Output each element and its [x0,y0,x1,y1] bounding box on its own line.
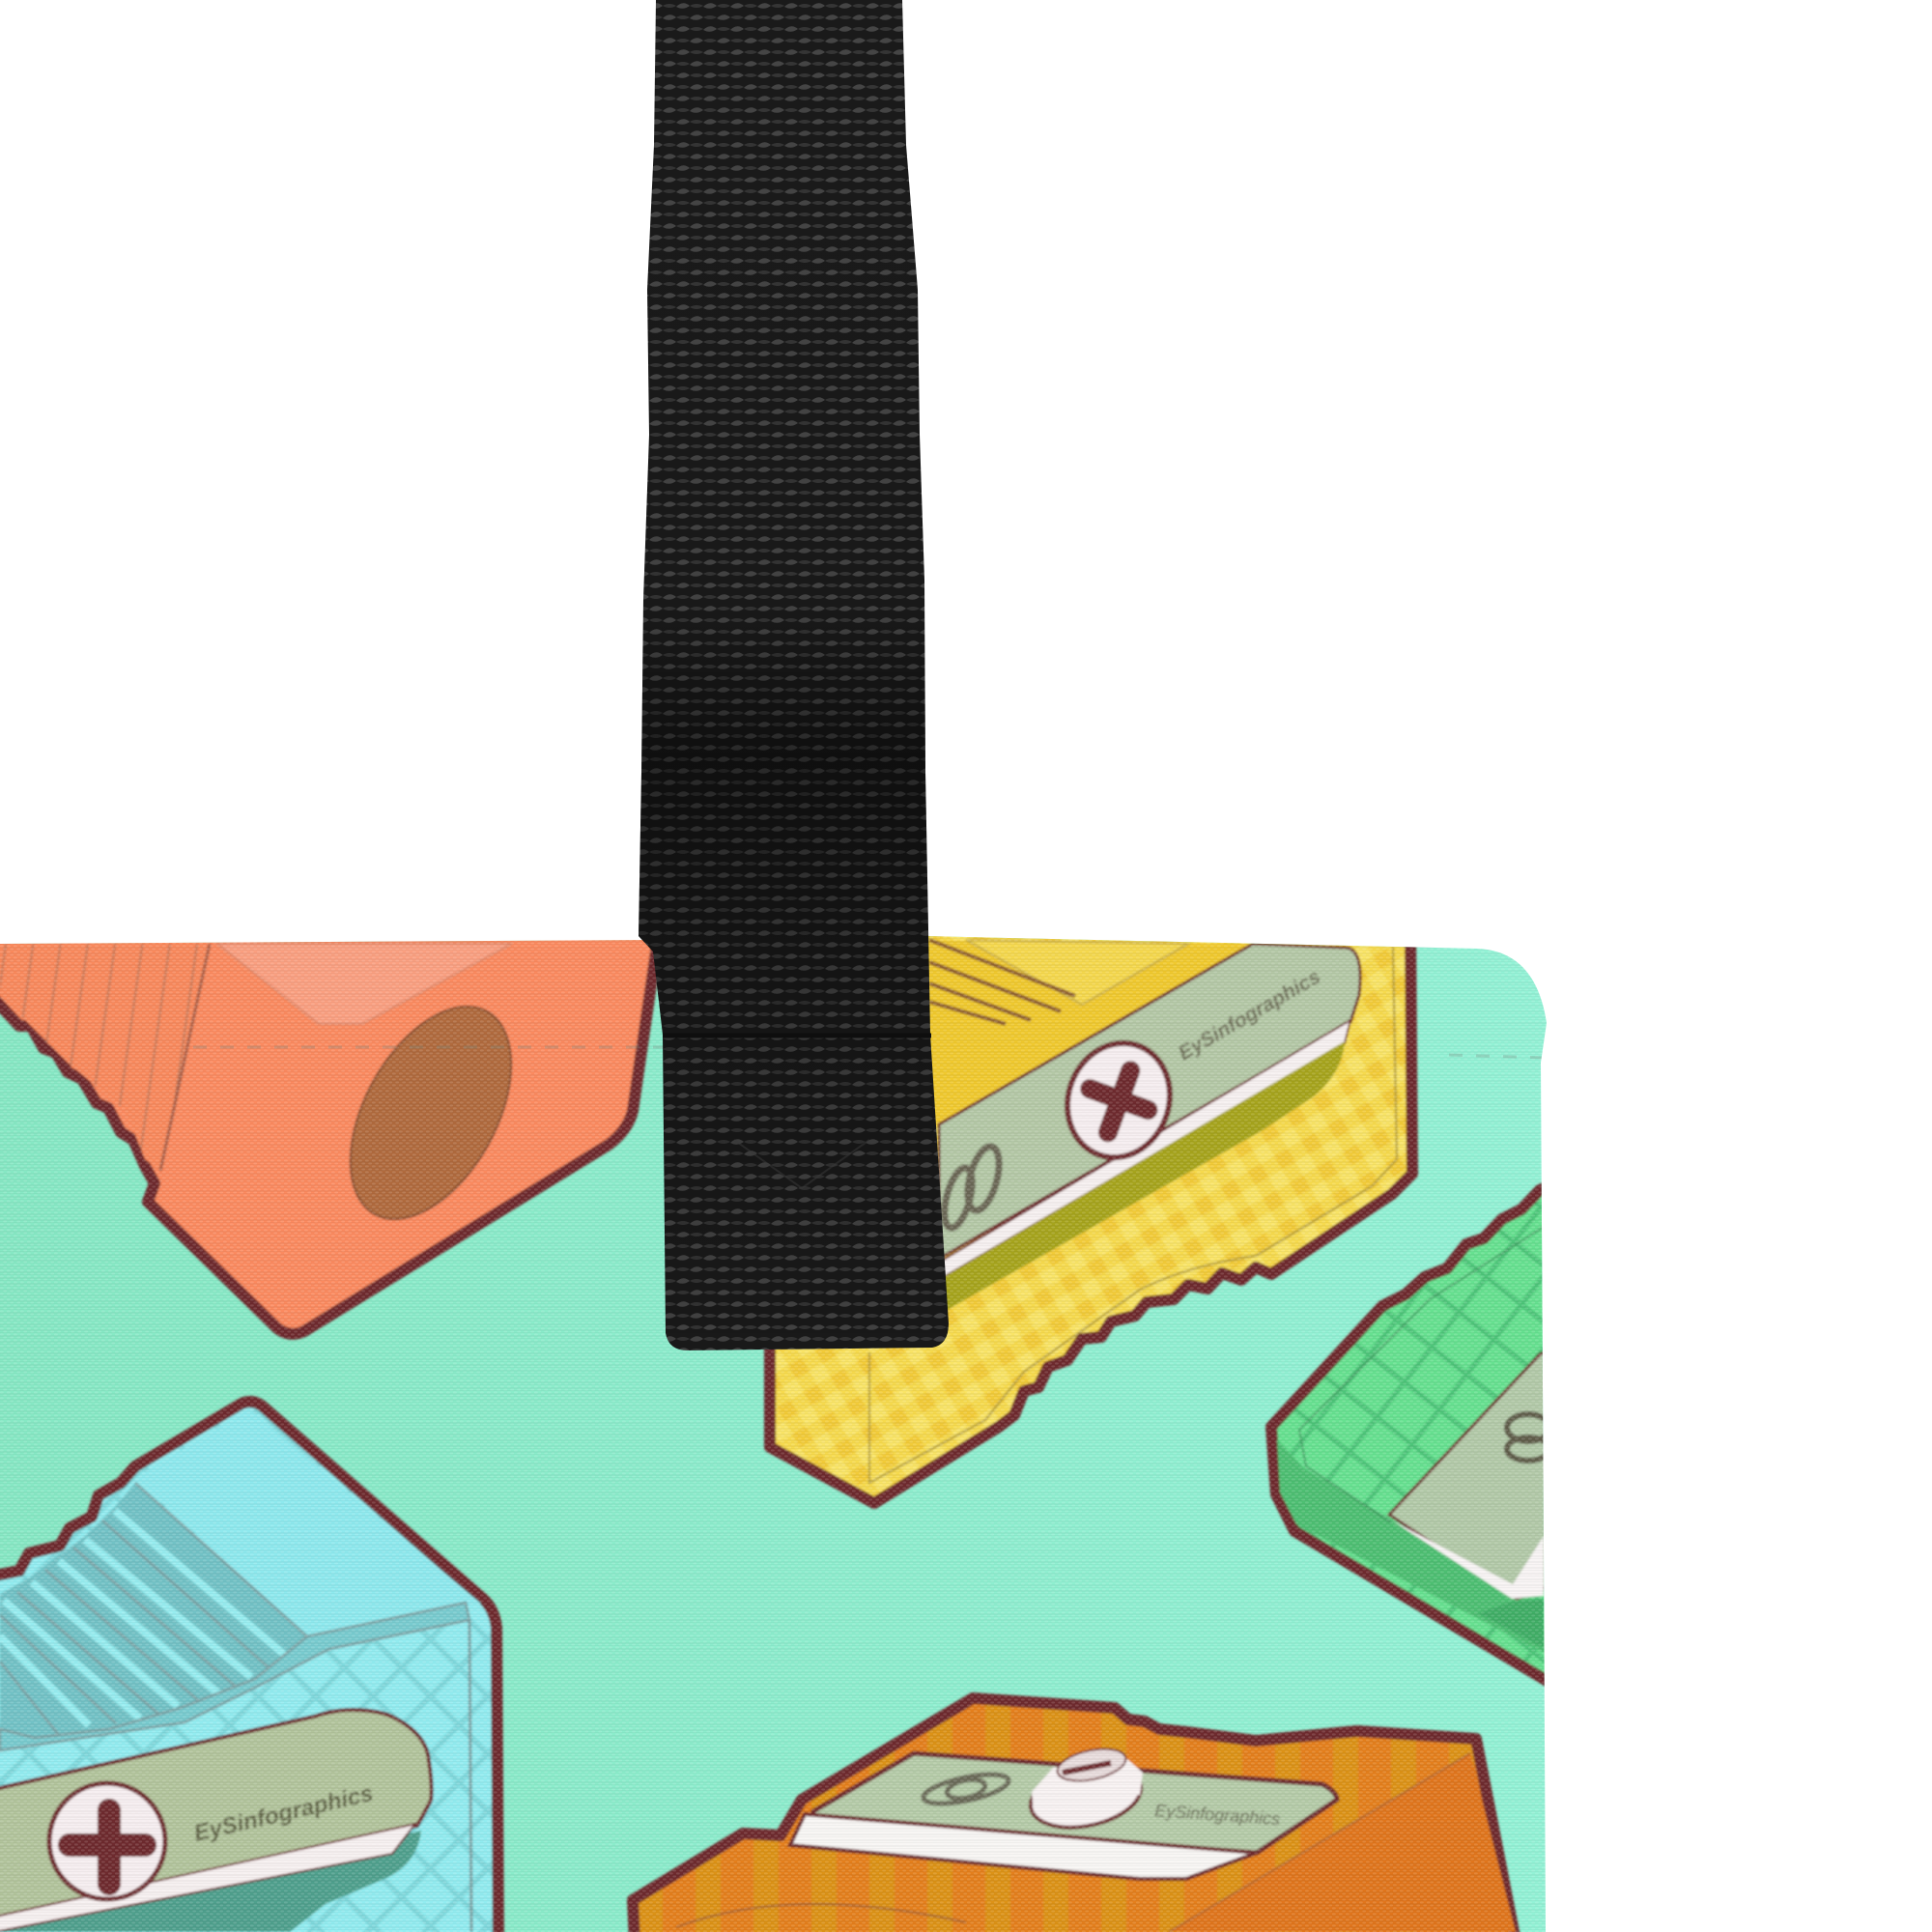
icon: green sharpener [1271,1183,1555,1686]
icon: screw on orange plate [1028,1747,1144,1832]
logo on green plate [1507,1414,1549,1461]
maker text on orange plate: EySinfographics [1154,1801,1281,1829]
maker text on blue plate: EySinfographics [191,1780,376,1847]
logo on yellow plate [939,1144,1005,1231]
rim on blue sharpener [0,1603,469,1750]
icon: coral sharpener [0,932,659,1334]
maker text on yellow plate: EySinfographics [1175,966,1324,1065]
icon: screw on yellow plate [1063,1039,1175,1161]
logo on orange plate [921,1769,1011,1809]
icon: blue sharpener [0,1402,498,1932]
icon: orange sharpener [633,1698,1516,1932]
strap: black webbing handle [639,0,949,1350]
panel: bag fabric [0,927,1555,1932]
stripes on blue sharpener [0,1483,307,1738]
icon: screw on blue plate [49,1783,165,1899]
icon: yellow sharpener [763,927,1412,1503]
